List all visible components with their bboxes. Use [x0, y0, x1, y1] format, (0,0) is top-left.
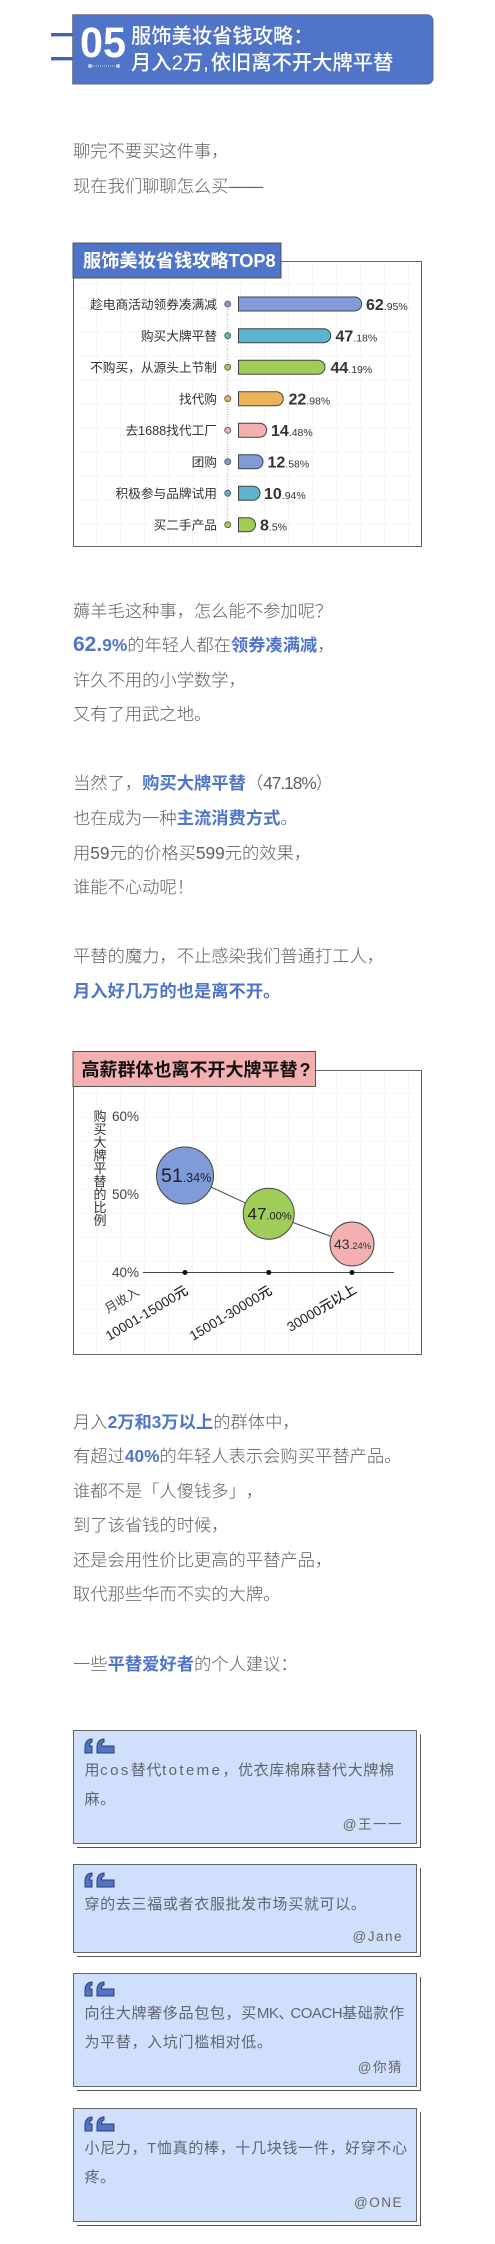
- icon: quotation mark: [84, 1872, 114, 1888]
- title text: [131, 25, 393, 74]
- x axis labels: 10001-15000元: [103, 1283, 190, 1344]
- row: group buying: 团购: [192, 454, 217, 470]
- title text: 月入2万,依旧离不开大牌平替: [131, 52, 393, 74]
- quote card 1: [73, 1730, 417, 1844]
- row: dupes: [141, 328, 377, 346]
- y axis title: 购: [93, 1109, 107, 1124]
- row: no buying: 不购买，从源头上节制: [90, 360, 217, 375]
- trend line: [185, 1175, 352, 1244]
- bubble 43.24%: [330, 1222, 374, 1266]
- body text: coupons and dupes: 也在成为一种主流消费方式。: [73, 808, 298, 828]
- row: 1688 factory: 去1688找代工厂: [125, 424, 217, 438]
- quote text: [84, 1762, 395, 1808]
- row: group buying: [192, 454, 309, 472]
- body text: coupons and dupes: [73, 600, 384, 1001]
- x axis: [143, 1270, 394, 1275]
- quote card 2: [73, 1864, 417, 1953]
- y axis title: 例: [93, 1213, 107, 1228]
- y axis ticks: 50%: [112, 1187, 139, 1202]
- chart panel: high income dupes: [72, 1051, 422, 1355]
- panel frame: [74, 1070, 422, 1354]
- author: @你猜: [358, 2060, 403, 2074]
- panel title: 高薪群体也离不开大牌平替?: [82, 1059, 310, 1080]
- y axis ticks: 60%: [112, 1109, 139, 1124]
- section number: 05: [80, 19, 126, 67]
- body text: coupons and dupes: 62.9%的年轻人都在领券凑满减，: [73, 633, 335, 656]
- quote card 4: [73, 2108, 417, 2222]
- body text: coupons and dupes: 许久不用的小学数学，: [73, 670, 246, 690]
- row: daigou: 找代购: [179, 392, 217, 406]
- row: brand trials: 10.94%: [264, 486, 306, 503]
- body text: high income group: 月入2万和3万以上的群体中，: [73, 1412, 300, 1432]
- x axis labels: 月收入: [102, 1285, 142, 1316]
- row: coupons: [90, 297, 408, 314]
- number underline: [88, 64, 120, 68]
- chart panel: top 8 money saving methods: [72, 242, 422, 547]
- title text: 服饰美妆省钱攻略：: [131, 25, 314, 48]
- row: second hand: [154, 518, 287, 535]
- row: second hand: 8.5%: [260, 518, 287, 535]
- x axis labels: [102, 1282, 359, 1344]
- intro text: 现在我们聊聊怎么买——: [73, 176, 263, 196]
- row: coupons: 趁电商活动领券凑满减: [90, 297, 217, 312]
- body text: coupons and dupes: 又有了用武之地。: [73, 704, 211, 724]
- dotted axis: [227, 304, 229, 525]
- icon: quotation mark: [84, 1738, 114, 1754]
- quote text: 向往大牌奢侈品包包，买MK、COACH基础款作: [84, 2004, 405, 2022]
- x axis labels: 15001-30000元: [187, 1283, 274, 1344]
- row: second hand: 买二手产品: [154, 518, 217, 532]
- row: coupons: 62.95%: [366, 297, 408, 314]
- quote text: 麻。: [84, 1791, 116, 1808]
- row: dupes: 购买大牌平替: [141, 328, 217, 344]
- author: @王一一: [343, 1817, 403, 1832]
- body text: coupons and dupes: 平替的魔力，不止感染我们普通打工人，: [73, 946, 384, 966]
- body text: high income group: 谁都不是「人傻钱多」，: [73, 1481, 263, 1501]
- y axis title: 比: [93, 1200, 107, 1215]
- panel title: [73, 1052, 316, 1086]
- intro text: 聊完不要买这件事，: [73, 141, 229, 161]
- quote text: 穿的去三福或者衣服批发市场买就可以。: [84, 1896, 367, 1913]
- quote text: 用cos替代toteme，优衣库棉麻替代大牌棉: [84, 1762, 395, 1779]
- panel title: [73, 243, 281, 278]
- y axis title: 大: [93, 1135, 107, 1150]
- quote text: 小尼力，T恤真的棒，十几块钱一件，好穿不心: [84, 2140, 408, 2156]
- y axis title: 买: [93, 1122, 107, 1137]
- quote text: 疼。: [84, 2169, 116, 2186]
- body text: coupons and dupes: 谁能不心动呢！: [73, 877, 194, 897]
- quote text: 为平替，入坑门槛相对低。: [84, 2034, 273, 2051]
- y axis ticks: 40%: [112, 1265, 139, 1280]
- body text: high income group: 取代那些华而不实的大牌。: [73, 1584, 280, 1604]
- body text: high income group: 到了该省钱的时候，: [73, 1515, 229, 1535]
- row: no buying: [90, 360, 372, 377]
- body text: high income group: 一些平替爱好者的个人建议：: [73, 1654, 298, 1674]
- bubble 51.34%: [156, 1147, 214, 1204]
- panel title: 服饰美妆省钱攻略TOP8: [83, 250, 276, 271]
- icon: quotation mark: [84, 2116, 114, 2132]
- author: @Jane: [353, 1929, 403, 1944]
- row: daigou: [179, 392, 330, 409]
- header banner: [51, 14, 434, 84]
- body text: coupons and dupes: 当然了，购买大牌平替（47.18%）: [73, 773, 333, 793]
- bubble 47.00%: 47.00%: [248, 1204, 292, 1224]
- row: group buying: 12.58%: [268, 455, 309, 472]
- body text: coupons and dupes: 月入好几万的也是离不开。: [73, 981, 280, 1001]
- body text: coupons and dupes: 用59元的价格买599元的效果，: [73, 843, 311, 863]
- icon: quotation mark: [84, 1982, 114, 1996]
- row: no buying: 44.19%: [330, 360, 372, 377]
- quote text: [84, 2140, 408, 2186]
- quote card 3: [73, 1972, 417, 2086]
- row: daigou: 22.98%: [288, 392, 330, 409]
- bubble 47.00%: [243, 1188, 294, 1239]
- author: @ONE: [354, 2194, 403, 2210]
- body text: high income group: 还是会用性价比更高的平替产品，: [73, 1550, 332, 1570]
- row: 1688 factory: 14.48%: [271, 423, 313, 440]
- bubble 43.24%: 43.24%: [334, 1236, 372, 1252]
- bubble 51.34%: 51.34%: [161, 1165, 211, 1187]
- row: brand trials: [116, 486, 306, 503]
- body text: high income group: [73, 1412, 401, 1674]
- quote text: [84, 2004, 405, 2051]
- row: dupes: 47.18%: [336, 329, 377, 346]
- y axis title: 平: [93, 1161, 107, 1176]
- panel frame: [74, 262, 422, 546]
- connector bars: [51, 33, 73, 60]
- x axis labels: 30000元以上: [284, 1282, 359, 1335]
- intro text: [73, 141, 264, 196]
- row: 1688 factory: [125, 423, 313, 440]
- y axis ticks: [112, 1109, 139, 1280]
- body text: high income group: 有超过40%的年轻人表示会购买平替产品。: [73, 1446, 401, 1466]
- y axis title: 替: [93, 1174, 107, 1189]
- y axis title: 牌: [93, 1148, 107, 1163]
- body text: coupons and dupes: 薅羊毛这种事，怎么能不参加呢？: [73, 600, 332, 620]
- title plate: [73, 15, 433, 84]
- y axis title: 的: [93, 1187, 107, 1202]
- row: brand trials: 积极参与品牌试用: [116, 486, 217, 501]
